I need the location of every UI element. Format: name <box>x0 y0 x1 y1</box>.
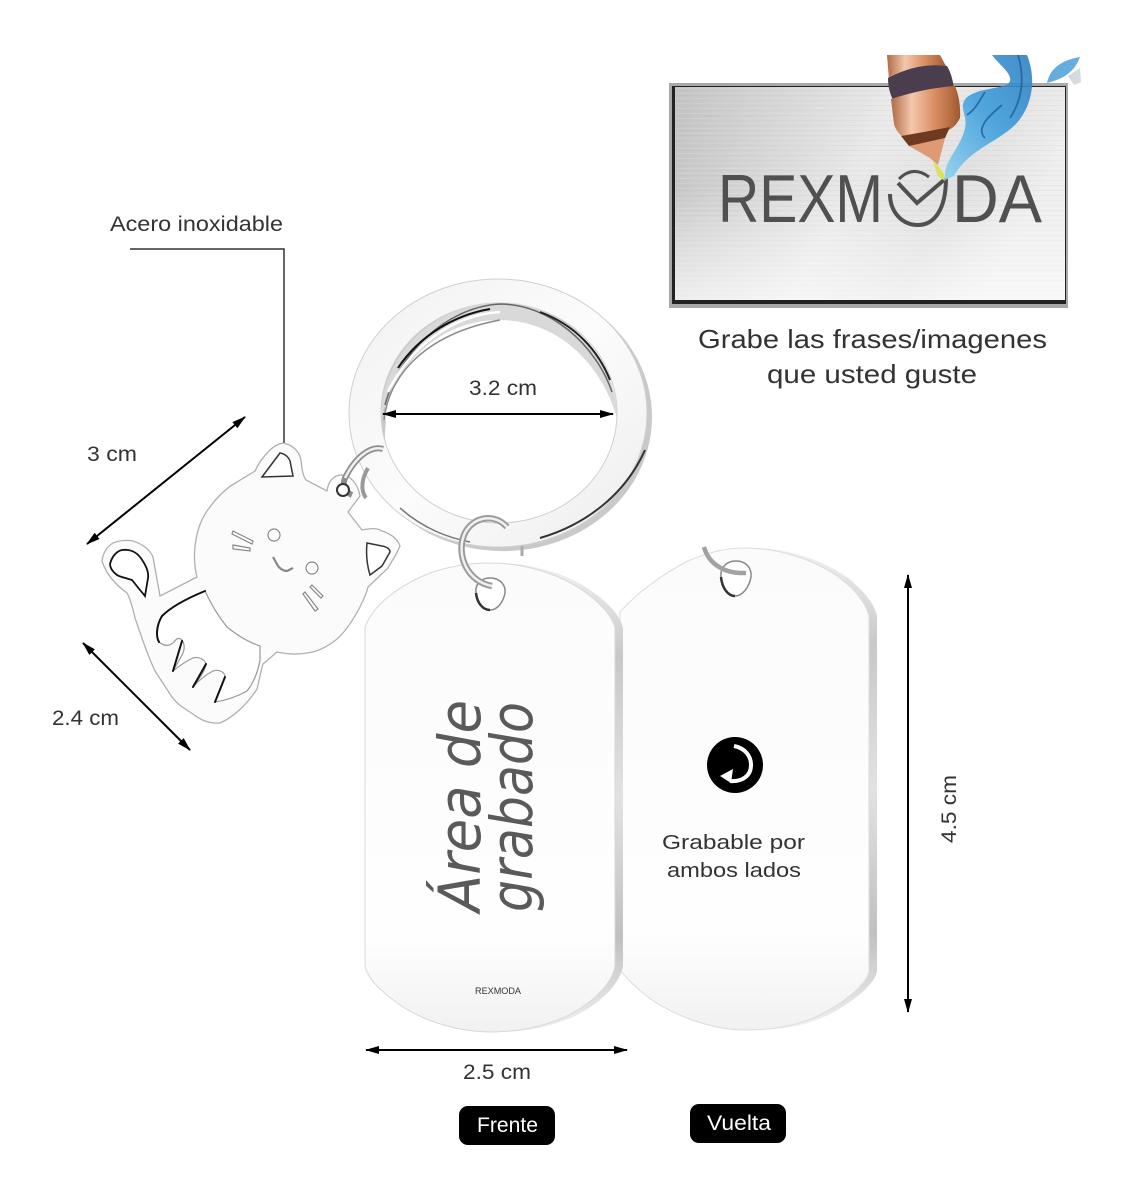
text: engraving area: Área de <box>425 700 494 916</box>
keyring inner shine <box>384 304 645 542</box>
text: engraving caption: Grabe las frases/imagenes <box>698 324 1047 354</box>
back tag face <box>620 548 869 1030</box>
cat face <box>232 529 323 611</box>
front tag hole shadow <box>476 593 490 610</box>
front tag jump ring <box>462 518 522 586</box>
text: engraving caption: que usted guste <box>767 359 977 389</box>
text: engraving area: grabado <box>478 702 546 912</box>
badge: front: Frente <box>477 1114 538 1137</box>
text: both sides: ambos lados <box>667 859 801 882</box>
leader line: material <box>130 249 284 443</box>
arrow: tag width <box>366 1049 627 1051</box>
keyring <box>349 279 652 551</box>
cat right ear <box>367 543 390 575</box>
label: cat width: 3 cm <box>87 443 137 466</box>
logo: small REXMODA: REXMODA <box>475 986 522 997</box>
front tag bevel <box>373 563 623 1032</box>
label: tag height: 4.5 cm <box>938 775 961 843</box>
front tag face <box>365 563 615 1032</box>
tag: front <box>365 518 623 1032</box>
badge: back <box>690 1104 786 1143</box>
text: both sides: Grabable por <box>662 831 805 854</box>
logo: REXMODA engraved: DA <box>952 161 1043 237</box>
label: material: Acero inoxidable <box>110 213 283 236</box>
badge: front <box>459 1106 555 1145</box>
icon: turn over <box>707 737 763 793</box>
label: cat height: 2.4 cm <box>52 707 119 730</box>
cat tail hole <box>110 550 148 596</box>
text: engraving area <box>425 700 546 916</box>
arrow: cat width <box>87 417 245 544</box>
text: engraving caption <box>698 324 1047 389</box>
plate frame <box>669 83 1068 308</box>
label: tag width: 2.5 cm <box>463 1061 531 1084</box>
charm: cat <box>102 443 400 723</box>
icon: laser nozzle <box>887 55 960 181</box>
text: both sides <box>662 831 805 882</box>
cat jump ring <box>337 448 383 498</box>
back tag hole <box>721 561 751 596</box>
keyring inner coil crescent <box>381 303 617 418</box>
arrow: tag height <box>907 575 909 1012</box>
plate dark edge <box>672 86 1066 304</box>
label: ring diameter: 3.2 cm <box>469 377 537 400</box>
logo: REXMODA engraved: REXM <box>718 161 883 237</box>
plate brushed surface <box>675 87 1065 300</box>
tag: back <box>620 547 877 1030</box>
keyring back coil <box>354 283 652 551</box>
icon: blue smoke <box>945 55 1081 180</box>
back tag bevel <box>628 548 877 1030</box>
back tag hole shadow <box>721 577 735 596</box>
back tag jump ring <box>704 547 746 573</box>
front tag hole <box>476 578 505 610</box>
arrow: ring diameter <box>383 413 613 415</box>
cat leg shadow stroke <box>157 591 225 702</box>
cat silhouette <box>102 443 400 723</box>
keyring front coil <box>349 279 647 547</box>
panel: engraving plate <box>669 55 1081 308</box>
cat leg cutout <box>157 591 260 702</box>
arrow: cat height <box>83 643 190 750</box>
cat left ear <box>262 453 293 477</box>
badge: back: Vuelta <box>707 1112 771 1135</box>
logo: REXMODA engraved <box>718 161 1043 237</box>
